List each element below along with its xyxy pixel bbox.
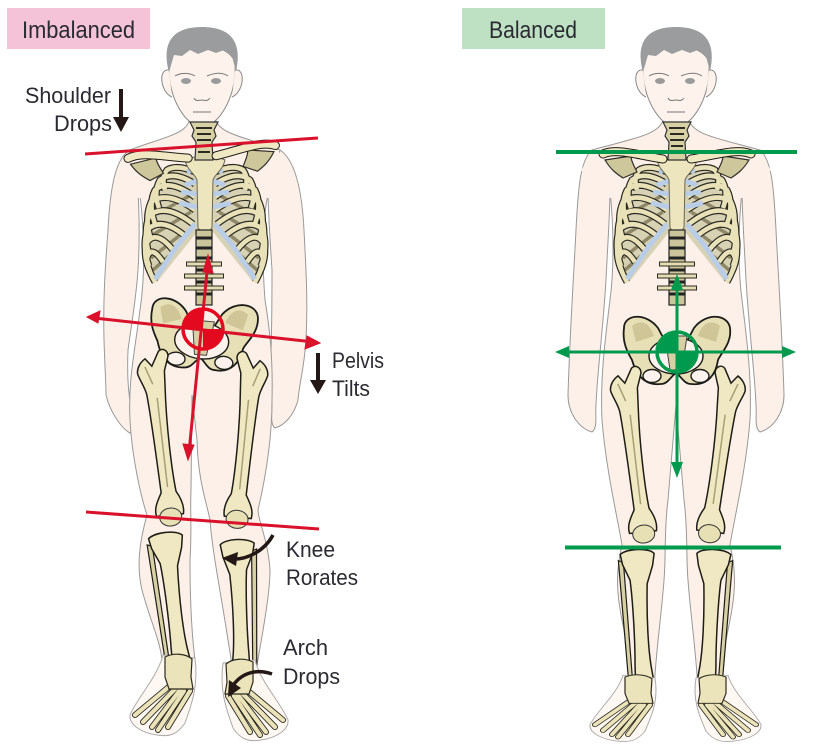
label: Imbalanced: Imbalanced: [22, 17, 135, 44]
panel: balanced figure: [555, 27, 797, 742]
centre of gravity marker: [657, 332, 697, 372]
callout: arch drops: Arch: [283, 635, 328, 660]
callout: pelvis tilts: Pelvis: [332, 348, 384, 373]
pelvis axis arrow: [87, 311, 320, 349]
centre of gravity marker: [183, 309, 223, 349]
callout: shoulder drops: Shoulder: [25, 83, 111, 108]
callout: shoulder drops: Drops: [54, 111, 112, 136]
spine axis arrow: [671, 274, 683, 478]
label: Balanced: Balanced: [489, 17, 577, 44]
callout: arch drops: Drops: [283, 664, 340, 689]
label: Balanced: [462, 8, 605, 49]
callout: pelvis tilts: [310, 348, 384, 401]
callout: pelvis tilts: Tilts: [332, 376, 370, 401]
callout: shoulder drops: [25, 83, 129, 136]
head: balanced: [636, 27, 716, 128]
knee line: [565, 546, 781, 550]
callout: knee rotates: Rorates: [286, 565, 358, 590]
skeleton: imbalanced: [128, 122, 288, 741]
head: imbalanced: [162, 27, 242, 128]
spine axis arrow: [183, 255, 213, 460]
pelvis axis arrow: [555, 346, 796, 358]
skeleton: balanced: [590, 122, 761, 742]
body outline: balanced: [568, 118, 784, 690]
panel: imbalanced figure: [85, 27, 320, 741]
shoulder line: [85, 138, 318, 154]
shoulder line: [556, 150, 797, 154]
callout: knee rotates: Knee: [286, 537, 335, 562]
callout: knee rotates: [222, 535, 358, 590]
knee line: [86, 512, 319, 529]
callout: arch drops: [228, 635, 340, 697]
label: Imbalanced: [7, 8, 150, 49]
body outline: imbalanced: [104, 118, 307, 665]
